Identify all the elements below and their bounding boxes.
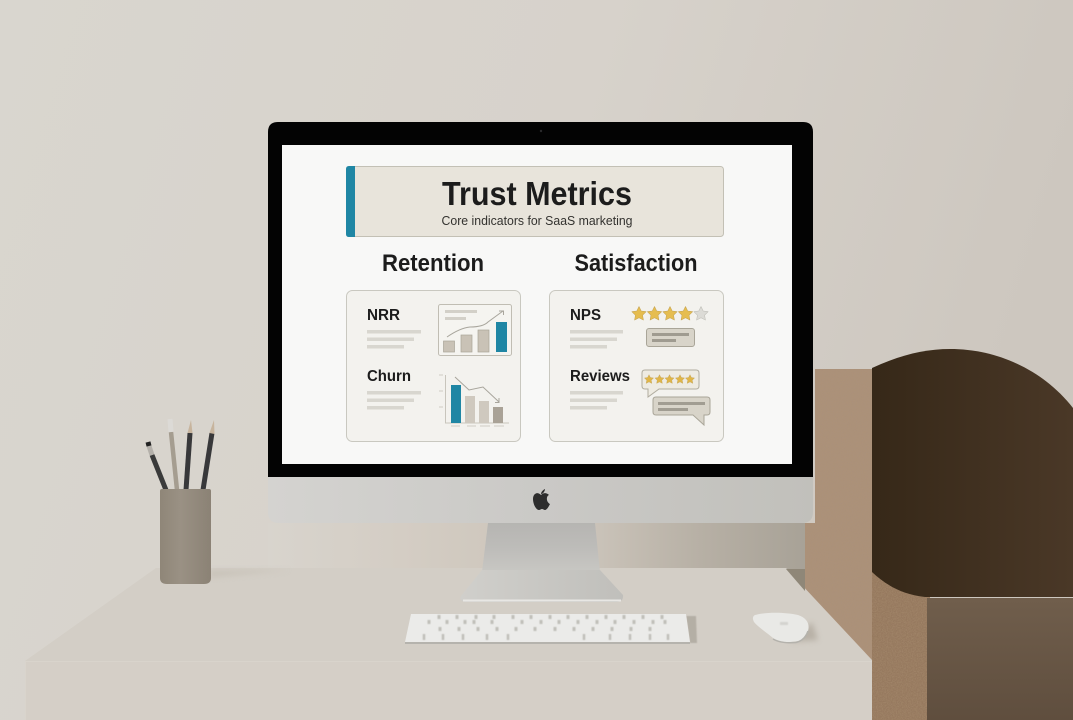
speech box: NPS [646,328,694,346]
webcam [540,130,542,132]
panel: satisfaction [550,290,724,442]
desk [25,568,872,720]
title banner [346,166,724,237]
mouse [753,613,818,643]
pencil: tilted dark [148,442,166,490]
pencil: light grey [170,419,177,490]
monitor [268,122,813,523]
wall shadow strips beneath monitor [268,523,805,569]
monitor stand [460,523,623,602]
cup body [160,489,211,584]
text placeholder lines: NRR [367,330,421,348]
bezel [268,122,813,477]
text placeholder lines: Churn [367,391,421,410]
speech bubble: five stars [642,370,699,397]
chart: NRR rising bars [438,304,512,356]
chair: cork side, dark arch back, cushion [805,349,1073,720]
icon: apple logo [533,489,550,510]
chart: churn falling bars [439,375,509,426]
text placeholder lines: Reviews [570,391,623,410]
cup shadow [208,570,290,578]
subtitle: Core indicators for SaaS marketing [442,213,632,228]
keyboard [405,614,697,644]
chin [268,477,813,523]
speech bubble: review lines [653,397,710,425]
heading: Retention: Retention [382,250,484,277]
text placeholder lines: NPS [570,330,623,348]
rating: four of five stars [632,306,708,320]
title: Trust Metrics [442,175,632,212]
label: Reviews: Reviews [570,368,630,385]
pencil cup with pencils [148,419,290,584]
pencil: dark centre [186,420,192,490]
screen [282,145,792,464]
pencil: dark right [203,420,214,490]
label: Churn: Churn [367,368,411,385]
label: NRR: NRR [367,307,400,324]
panel: retention [346,290,520,442]
heading: Satisfaction: Satisfaction [574,250,698,277]
label: NPS: NPS [570,307,601,324]
